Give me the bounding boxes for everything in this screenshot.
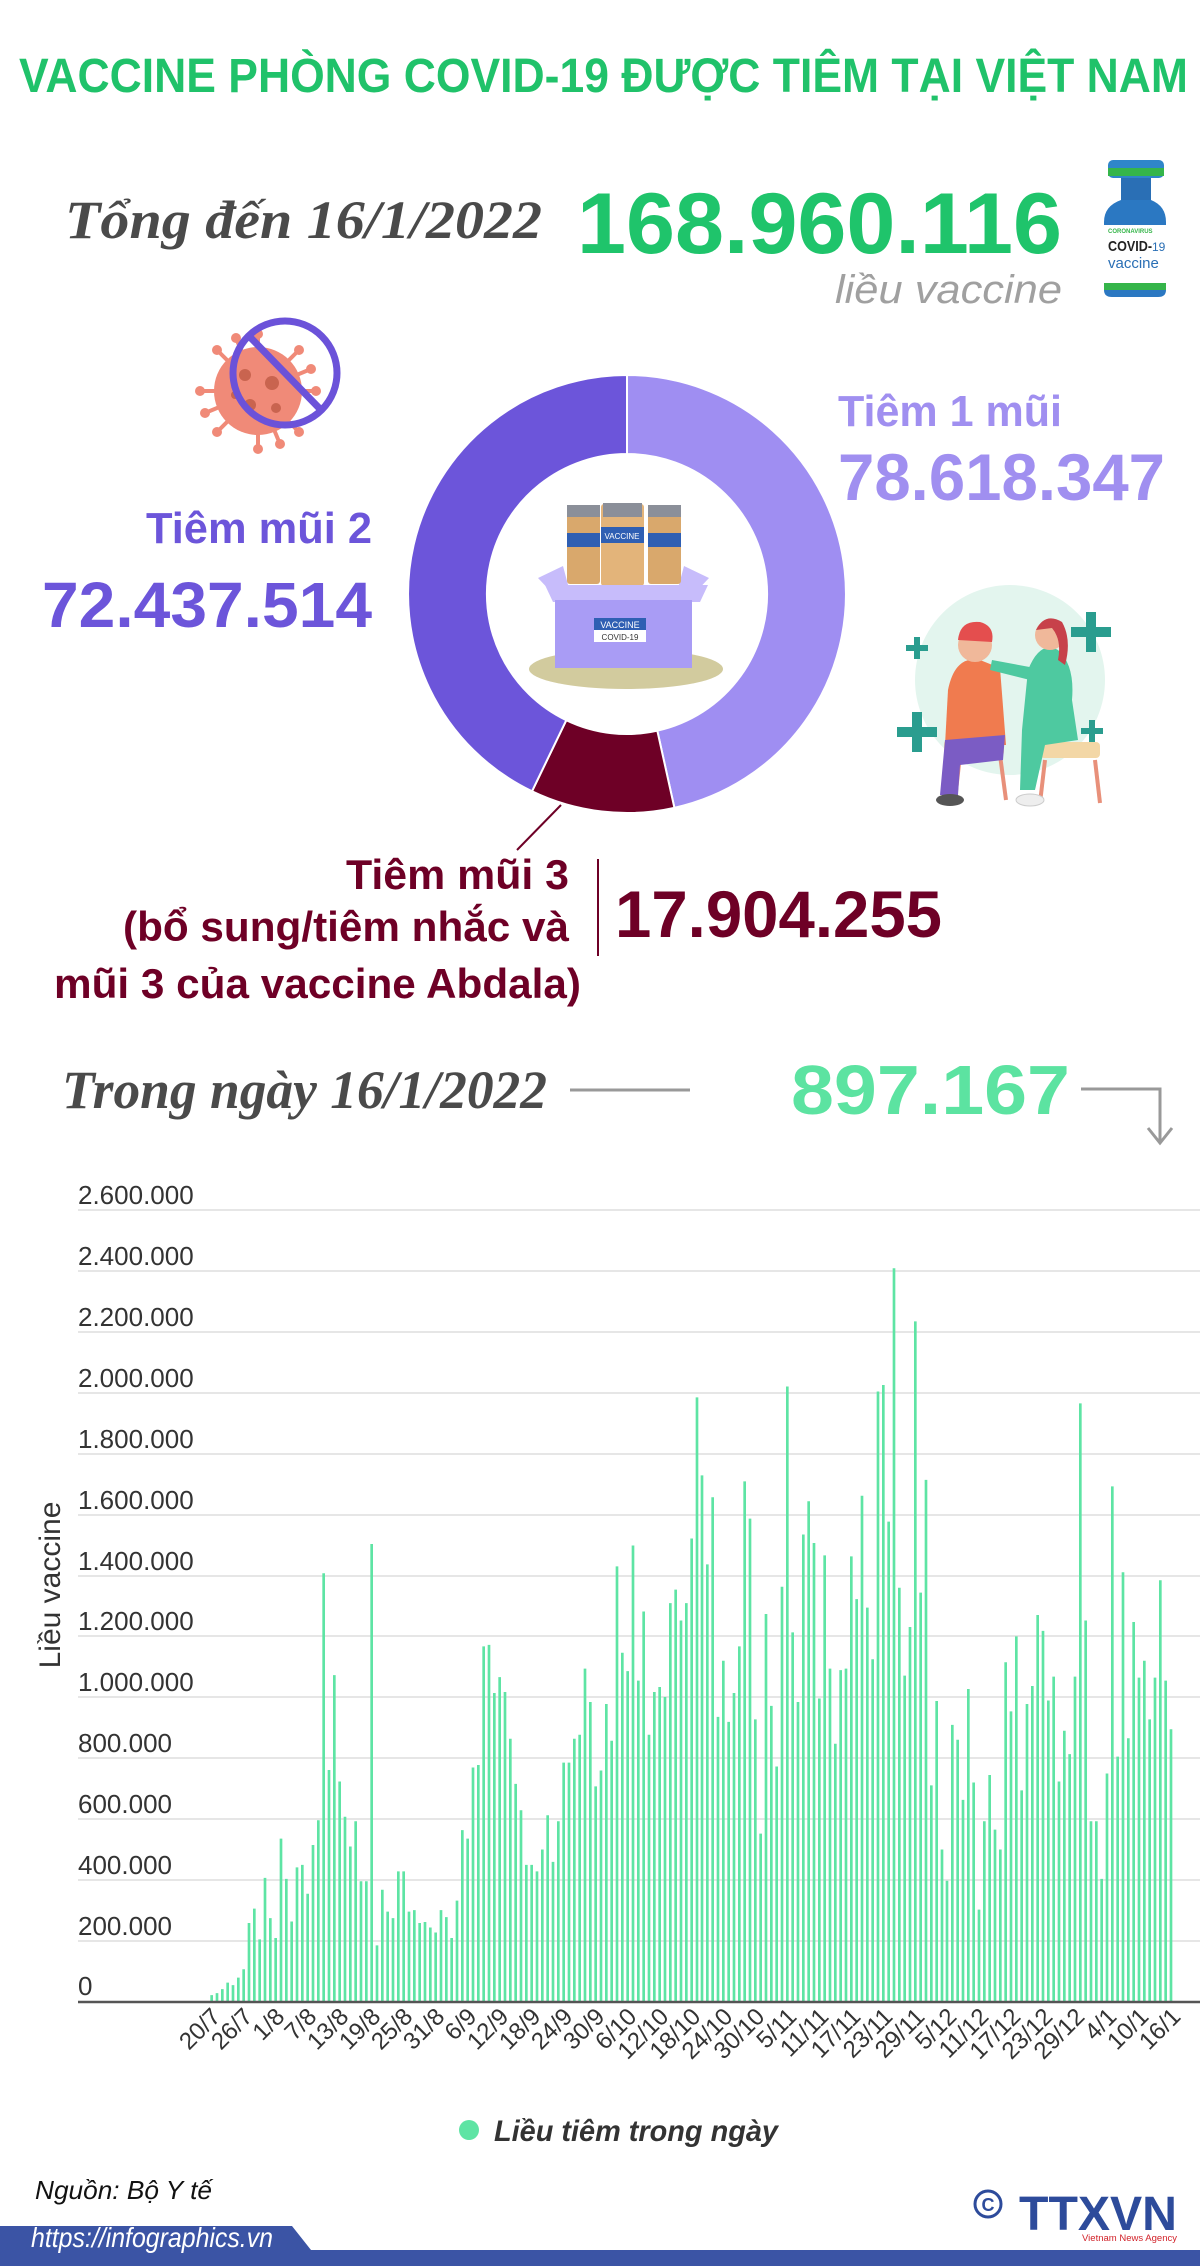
- label: dose 3: 17.904.255: [615, 877, 942, 951]
- footer bar with URL: [0, 2222, 1200, 2266]
- x-axis date labels: 30/10: [709, 2003, 770, 2065]
- x-axis date labels: 24/10: [677, 2003, 738, 2065]
- x-axis date labels: 23/11: [838, 2003, 898, 2063]
- x-axis date labels: 10/1: [1102, 2003, 1154, 2055]
- source note: Nguồn: Bộ Y tế: [35, 2175, 214, 2205]
- leader line: dose 3: [517, 805, 561, 850]
- segment: dose 3: [532, 720, 674, 813]
- x-axis date labels: 23/12: [997, 2003, 1058, 2065]
- logo: TTXVN: TTXVN: [1019, 2188, 1177, 2241]
- label: dose 3: [54, 851, 942, 1007]
- x-axis date labels: 31/8: [398, 2003, 450, 2055]
- x-axis date labels: 6/9: [440, 2003, 482, 2046]
- gridlines and y-axis labels: 600.000: [78, 1789, 172, 1819]
- heading: total to date: Tổng đến 16/1/2022: [65, 190, 542, 250]
- x-axis date labels: 16/1: [1134, 2003, 1186, 2055]
- gridlines and y-axis labels: 2.600.000: [78, 1180, 194, 1210]
- arrow: pointing down to chart: [1081, 1089, 1172, 1143]
- icon: vaccine box in donut center: VACCINE: [605, 532, 639, 541]
- segment: dose 2: [408, 375, 627, 791]
- icon: virus with ban sign: [195, 321, 337, 454]
- label: dose 1: 78.618.347: [838, 440, 1165, 514]
- y-axis title: Liều vaccine: [34, 1502, 67, 1668]
- x-axis date labels: 1/8: [248, 2003, 290, 2046]
- icon: vaccine vial: CORONAVIRUS: [1108, 229, 1153, 235]
- x-axis date labels: 25/8: [366, 2003, 418, 2055]
- daily number: 897.167: [791, 1051, 1070, 1129]
- gridlines and y-axis labels: 800.000: [78, 1728, 172, 1758]
- x-axis date labels: 24/9: [526, 2003, 578, 2055]
- x-axis date labels: 6/10: [590, 2003, 642, 2055]
- x-axis date labels: 29/11: [870, 2003, 930, 2063]
- gridlines and y-axis labels: 400.000: [78, 1850, 172, 1880]
- icon: vaccine vial: vaccine: [1108, 255, 1159, 272]
- gridlines and y-axis labels: 1.400.000: [78, 1546, 194, 1576]
- x-axis date labels: 26/7: [206, 2003, 258, 2055]
- label: dose 1: [838, 387, 1165, 514]
- gridlines and y-axis labels: 1.800.000: [78, 1424, 194, 1454]
- label: dose 1: Tiêm 1 mũi: [838, 387, 1062, 436]
- icon: vaccine vial: COVID-: [1108, 238, 1152, 255]
- x-axis date labels: 11/12: [934, 2003, 994, 2063]
- gridlines and y-axis labels: 200.000: [78, 1911, 172, 1941]
- donut chart: [408, 375, 846, 813]
- gridlines and y-axis labels: 1.200.000: [78, 1606, 194, 1636]
- gridlines and y-axis labels: 2.000.000: [78, 1363, 194, 1393]
- label: dose 2: Tiêm mũi 2: [146, 504, 372, 553]
- gridlines and y-axis labels: 0: [78, 1971, 92, 2001]
- x-axis date labels: 4/1: [1080, 2003, 1122, 2046]
- legend: Liều tiêm trong ngày: [494, 2115, 779, 2148]
- x-axis date labels: 13/8: [302, 2003, 354, 2055]
- label: dose 2: [42, 504, 372, 641]
- total number: 168.960.116: [577, 176, 1062, 272]
- x-axis date labels: 29/12: [1029, 2003, 1090, 2065]
- icon: vaccine vial: 19: [1152, 240, 1166, 254]
- gridlines and y-axis labels: [78, 1180, 1200, 2001]
- gridlines and y-axis labels: 1.600.000: [78, 1485, 194, 1515]
- bars: [212, 1268, 1171, 2003]
- gridlines and y-axis labels: 2.400.000: [78, 1241, 194, 1271]
- x-axis date labels: 12/10: [613, 2003, 674, 2065]
- logo: TTXVN: C: [982, 2195, 994, 2215]
- icon: vaccine box in donut center: VACCINE: [600, 620, 640, 630]
- x-axis date labels: [174, 2003, 1186, 2065]
- label: dose 2: 72.437.514: [42, 569, 372, 641]
- footer bar with URL: https://infographics.vn: [31, 2222, 273, 2253]
- connector line: [570, 1088, 690, 1092]
- x-axis date labels: 20/7: [174, 2003, 226, 2055]
- x-axis date labels: 30/9: [558, 2003, 610, 2055]
- x-axis date labels: 11/11: [775, 2003, 834, 2062]
- segment: dose 1: [627, 375, 846, 808]
- x-axis date labels: 17/12: [965, 2003, 1026, 2065]
- x-axis date labels: 18/10: [645, 2003, 706, 2065]
- logo: TTXVN: Vietnam News Agency: [1082, 2233, 1178, 2243]
- x-axis date labels: 17/11: [806, 2003, 866, 2063]
- x-axis date labels: 12/9: [462, 2003, 514, 2055]
- illustration: nurse vaccinating patient: [897, 585, 1111, 806]
- x-axis date labels: 5/12: [910, 2003, 962, 2055]
- x-axis date labels: 5/11: [751, 2003, 802, 2054]
- label: dose 3: Tiêm mũi 3: [346, 851, 569, 898]
- heading: daily: Trong ngày 16/1/2022: [62, 1060, 547, 1120]
- x-axis date labels: 7/8: [280, 2003, 322, 2046]
- label: dose 3: mũi 3 của vaccine Abdala): [54, 960, 581, 1007]
- x-axis date labels: 19/8: [334, 2003, 386, 2055]
- bar chart: [34, 1180, 1200, 2065]
- x-axis date labels: 18/9: [494, 2003, 546, 2055]
- icon: vaccine box in donut center: COVID-19: [602, 633, 639, 642]
- icon: vaccine vial: [1104, 160, 1166, 297]
- x axis line: [78, 2001, 1200, 2003]
- unit label: liều vaccine: [835, 268, 1062, 312]
- gridlines and y-axis labels: 1.000.000: [78, 1667, 194, 1697]
- label: dose 3: (bổ sung/tiêm nhắc và: [123, 902, 570, 950]
- gridlines and y-axis labels: 2.200.000: [78, 1302, 194, 1332]
- icon: vaccine box in donut center: [529, 503, 723, 689]
